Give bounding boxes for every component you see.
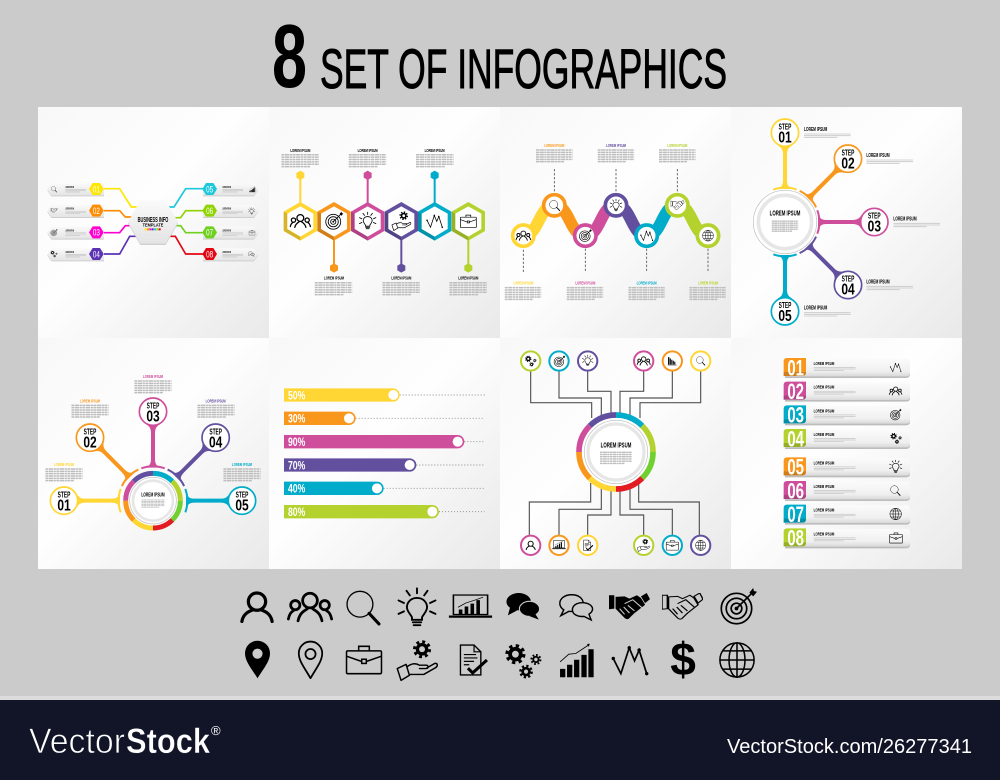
left bars 01-04: LOREM IPSUM — [65, 230, 74, 232]
step nodes: STEP — [147, 400, 159, 410]
right bars 05-08: 07 — [206, 228, 213, 238]
right bars 05-08: LOREM IPSUM — [222, 230, 231, 232]
left bars 01-04: LOREM IPSUM — [65, 252, 74, 254]
footer band: Stock — [126, 722, 210, 761]
left bars 01-04: LOREM IPSUM — [65, 187, 74, 189]
row 08: LOREM IPSUM — [814, 531, 834, 536]
spokes — [773, 145, 862, 299]
captions: LOREM IPSUM — [54, 462, 74, 467]
panel: hexagon hub with eight numbered bars — [38, 107, 269, 338]
dashed leaders — [523, 169, 708, 274]
wave band — [523, 205, 708, 236]
central hexagon: TEMPLATE — [143, 222, 163, 227]
bottom icon nodes — [521, 536, 710, 555]
spokes — [76, 424, 230, 512]
footer band — [0, 696, 1000, 780]
row 02: 02 — [787, 379, 804, 404]
step nodes: 02 — [83, 434, 97, 451]
captions: LOREM IPSUM — [544, 143, 564, 148]
right bars 05-08: 06 — [206, 206, 213, 216]
bar 80% — [284, 505, 439, 519]
right bars 05-08 — [202, 183, 258, 261]
left bars 01-04: 04 — [93, 249, 100, 259]
top icon nodes — [521, 351, 710, 371]
title: 8 — [272, 7, 307, 107]
dotted guides — [356, 395, 485, 512]
captions: LOREM IPSUM — [698, 281, 718, 286]
row 07: 07 — [787, 502, 804, 527]
left bars 01-04 — [47, 183, 104, 261]
row 04: LOREM IPSUM — [814, 432, 834, 437]
row 05: 05 — [787, 455, 804, 480]
central hexagon — [128, 200, 178, 245]
title — [272, 7, 727, 107]
captions — [45, 374, 261, 481]
row 03: LOREM IPSUM — [814, 408, 834, 413]
icon: dollar: $ — [670, 633, 696, 685]
bar 30%: 30% — [288, 412, 306, 426]
panel: numbered list rows — [731, 338, 962, 569]
panel: percentage bar chart — [269, 338, 500, 569]
central circle — [128, 476, 178, 525]
row 03: 03 — [787, 403, 804, 428]
stems with small hexagons — [296, 171, 472, 273]
captions — [804, 127, 940, 316]
right bars 05-08: LOREM IPSUM — [222, 187, 231, 189]
panel: six hexagon chain — [269, 107, 500, 338]
captions: LOREM IPSUM — [804, 127, 827, 133]
bar 50% — [284, 388, 400, 402]
row 03 — [784, 403, 910, 428]
row 07: LOREM IPSUM — [814, 508, 834, 513]
right bars 05-08: LOREM IPSUM — [222, 252, 231, 254]
central circle — [753, 190, 817, 254]
step nodes — [771, 119, 888, 325]
step nodes: 01 — [778, 129, 792, 146]
step nodes: 05 — [235, 497, 249, 514]
captions: LOREM IPSUM — [637, 281, 657, 286]
step nodes: 05 — [778, 308, 792, 325]
row 05 — [784, 455, 910, 480]
bar 30% — [284, 412, 356, 426]
step nodes: 04 — [209, 434, 222, 451]
row 02: LOREM IPSUM — [814, 385, 834, 390]
captions: LOREM IPSUM — [458, 276, 478, 281]
left bars 01-04: 01 — [93, 184, 100, 194]
row 02 — [784, 379, 910, 404]
captions: LOREM IPSUM — [80, 398, 100, 403]
footer band: ® — [211, 723, 221, 738]
captions: LOREM IPSUM — [425, 148, 445, 153]
row 08 — [784, 526, 910, 551]
captions — [505, 143, 726, 299]
icon set row 1 — [242, 588, 757, 625]
right bars 05-08: 05 — [206, 184, 213, 194]
step nodes: STEP — [842, 274, 854, 284]
bar 70%: 70% — [288, 458, 306, 472]
captions: LOREM IPSUM — [804, 306, 827, 312]
central circle — [582, 418, 650, 486]
bar 40%: 40% — [288, 482, 306, 496]
panel: circuit diagram — [500, 338, 731, 569]
captions: LOREM IPSUM — [893, 216, 917, 222]
captions: LOREM IPSUM — [232, 462, 252, 467]
nodes with icons — [513, 195, 719, 246]
segmented ring — [579, 415, 653, 489]
row 04 — [784, 426, 910, 451]
row 06: LOREM IPSUM — [814, 484, 834, 489]
row 01 — [784, 355, 910, 380]
captions: LOREM IPSUM — [143, 374, 163, 379]
captions: LOREM IPSUM — [513, 281, 533, 286]
step nodes: STEP — [209, 426, 222, 436]
row 07 — [784, 502, 910, 527]
step nodes: STEP — [842, 147, 854, 157]
bar 50%: 50% — [288, 388, 306, 402]
step nodes: STEP — [84, 426, 96, 436]
footer band: VectorStock.com/26277341 — [727, 736, 972, 758]
bar 90%: 90% — [288, 435, 306, 449]
panel: radial five steps fan — [38, 338, 269, 569]
step nodes: STEP — [868, 211, 881, 221]
step nodes: 03 — [868, 219, 881, 236]
row 06: 06 — [787, 478, 804, 503]
central circle: LOREM IPSUM — [770, 211, 800, 218]
step nodes: STEP — [779, 121, 791, 131]
central hexagon: BUSINESS INFO — [138, 217, 169, 224]
central circle: LOREM IPSUM — [141, 492, 165, 498]
icon set row 2 — [245, 633, 754, 685]
row 08: 08 — [787, 526, 804, 551]
central circle: LOREM IPSUM — [601, 443, 631, 450]
captions: LOREM IPSUM — [206, 398, 226, 403]
step nodes: 02 — [841, 155, 855, 172]
step nodes: 03 — [146, 408, 160, 425]
bar 90% — [284, 435, 464, 449]
row 01: LOREM IPSUM — [814, 361, 834, 366]
step nodes: 04 — [841, 282, 855, 299]
captions: LOREM IPSUM — [575, 281, 595, 286]
hexagons — [284, 202, 485, 241]
title: SET OF INFOGRAPHICS — [320, 37, 727, 100]
captions: LOREM IPSUM — [866, 279, 890, 285]
circuit lines — [529, 371, 701, 535]
captions: LOREM IPSUM — [667, 143, 687, 148]
row 06 — [784, 478, 910, 503]
step nodes: STEP — [236, 489, 248, 499]
right bars 05-08: 08 — [206, 249, 213, 259]
captions: LOREM IPSUM — [606, 143, 626, 148]
row 05: LOREM IPSUM — [814, 460, 834, 465]
captions — [281, 148, 487, 295]
row 04: 04 — [787, 426, 805, 451]
bar 80%: 80% — [288, 505, 306, 519]
step nodes: 01 — [57, 497, 71, 514]
captions: LOREM IPSUM — [391, 276, 411, 281]
step nodes: STEP — [58, 489, 70, 499]
connector lines — [103, 189, 203, 254]
panel: wave timeline — [500, 107, 731, 338]
step nodes — [50, 398, 256, 514]
left bars 01-04: LOREM IPSUM — [65, 209, 74, 211]
captions: LOREM IPSUM — [324, 276, 344, 281]
left bars 01-04: 03 — [93, 228, 100, 238]
bar 40% — [284, 482, 384, 496]
right bars 05-08: LOREM IPSUM — [222, 209, 231, 211]
bar 70% — [284, 458, 416, 472]
row 01: 01 — [787, 355, 804, 380]
captions: LOREM IPSUM — [358, 148, 378, 153]
step nodes: STEP — [779, 300, 791, 310]
panel: radial five steps right — [731, 107, 962, 338]
captions: LOREM IPSUM — [866, 153, 890, 159]
captions: LOREM IPSUM — [290, 148, 310, 153]
segmented ring — [126, 473, 180, 528]
left bars 01-04: 02 — [93, 206, 100, 216]
footer band: Vector — [29, 722, 125, 761]
